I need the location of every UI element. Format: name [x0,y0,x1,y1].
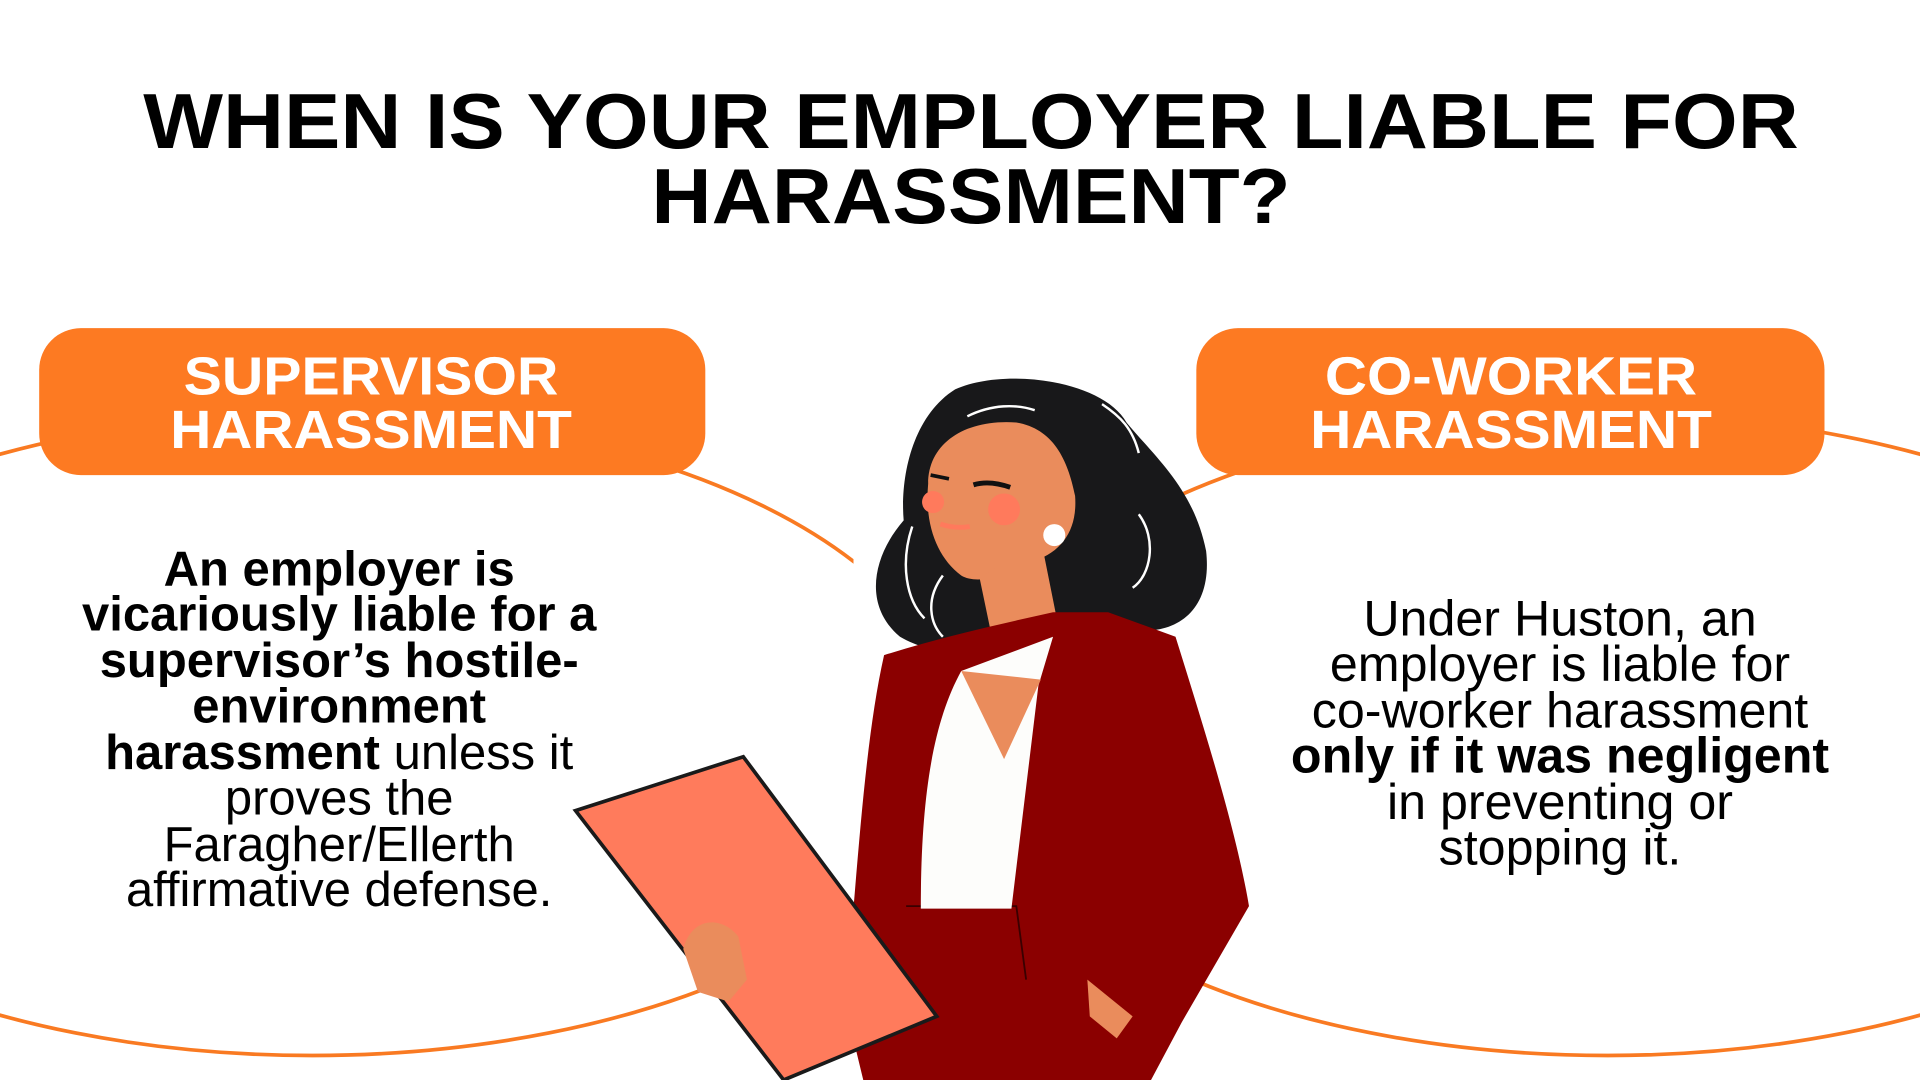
text block: supervisor rule: vicariously liable for a [82,588,597,642]
text block: co-worker rule: Under Huston, an [1363,591,1757,647]
text block: supervisor rule: environment [192,679,486,733]
title: WHEN IS YOUR EMPLOYER LIABLE FOR [143,77,1799,165]
blouse [921,637,1053,909]
text block: co-worker rule: co-worker harassment [1312,682,1808,738]
hair [876,379,1207,653]
panel: supervisor harassment heading pill: SUPERVISOR [184,346,558,406]
panel: co-worker harassment heading pill: HARASSMENT [1310,400,1712,460]
panel: co-worker harassment heading pill [1196,328,1824,475]
panel: co-worker harassment heading pill: CO-WORKER [1325,346,1697,406]
panel: supervisor harassment heading pill [39,328,705,475]
blazer [845,612,1249,1080]
text block: co-worker rule: employer is liable for [1330,636,1790,692]
title: HARASSMENT? [651,152,1291,240]
text block: co-worker rule [1291,591,1829,875]
text block: co-worker rule: in preventing or [1387,774,1733,830]
text block: supervisor rule: proves the [225,771,454,825]
panel: supervisor harassment heading pill: HARASSMENT [170,400,572,460]
illustration: businesswoman with clipboard [576,379,1249,1080]
text block: co-worker rule: stopping it. [1439,819,1681,875]
text block: supervisor rule: harassment unless it [105,726,574,780]
face [928,422,1075,579]
text block: supervisor rule [82,542,597,917]
clipboard [576,757,937,1080]
title [143,77,1799,240]
text block: supervisor rule: supervisor’s hostile- [100,634,579,688]
text block: supervisor rule: Faragher/Ellerth [164,818,515,872]
text block: supervisor rule: An employer is [164,542,515,596]
hand [683,922,747,1002]
text block: supervisor rule: affirmative defense. [126,863,552,917]
text block: co-worker rule: only if it was negligent [1291,728,1829,784]
